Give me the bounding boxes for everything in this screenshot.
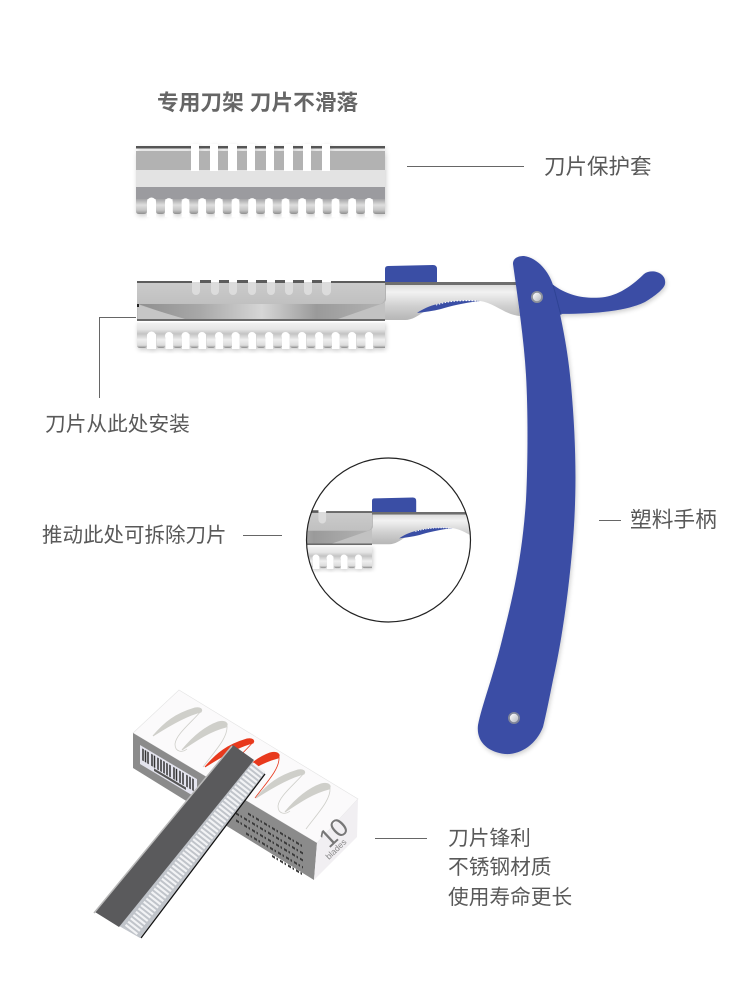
- label: push to remove: 推动此处可拆除刀片: [42, 524, 226, 547]
- box artwork: second grey razor motif: [256, 770, 330, 829]
- leader line: blade: [375, 838, 427, 840]
- leader line: handle: [599, 520, 621, 522]
- box artwork: grey razor motif: [153, 708, 227, 767]
- blade guard: [136, 144, 385, 214]
- end screw: [508, 712, 520, 724]
- magnified circle detail: [306, 457, 472, 623]
- text block: blade features: 不锈钢材质: [448, 856, 551, 879]
- leader line: blade guard: [407, 166, 524, 168]
- box artwork: red razor motif: [205, 739, 279, 798]
- blade guard tooth gaps: [147, 198, 373, 217]
- leader line: push to remove: [243, 534, 282, 536]
- text block: blade features: 刀片锋利: [448, 827, 531, 850]
- title: 专用刀架 刀片不滑落: [157, 90, 359, 115]
- box end label: 10: [313, 812, 354, 853]
- label: blade guard: 刀片保护套: [544, 155, 652, 179]
- label: plastic handle: 塑料手柄: [630, 507, 717, 532]
- text block: blade features: [448, 827, 572, 909]
- box side print: [236, 806, 303, 874]
- leader line: install point: [100, 318, 136, 398]
- blade box: [133, 690, 358, 880]
- text block: blade features: 使用寿命更长: [448, 886, 572, 909]
- box end label: blades: [323, 837, 348, 861]
- label: install point: 刀片从此处安装: [45, 413, 190, 436]
- barcode: [140, 745, 197, 798]
- razor blade head: [137, 265, 520, 349]
- razor handle: [478, 256, 665, 754]
- loose razor blade: [94, 745, 265, 938]
- pivot screw: [531, 291, 543, 303]
